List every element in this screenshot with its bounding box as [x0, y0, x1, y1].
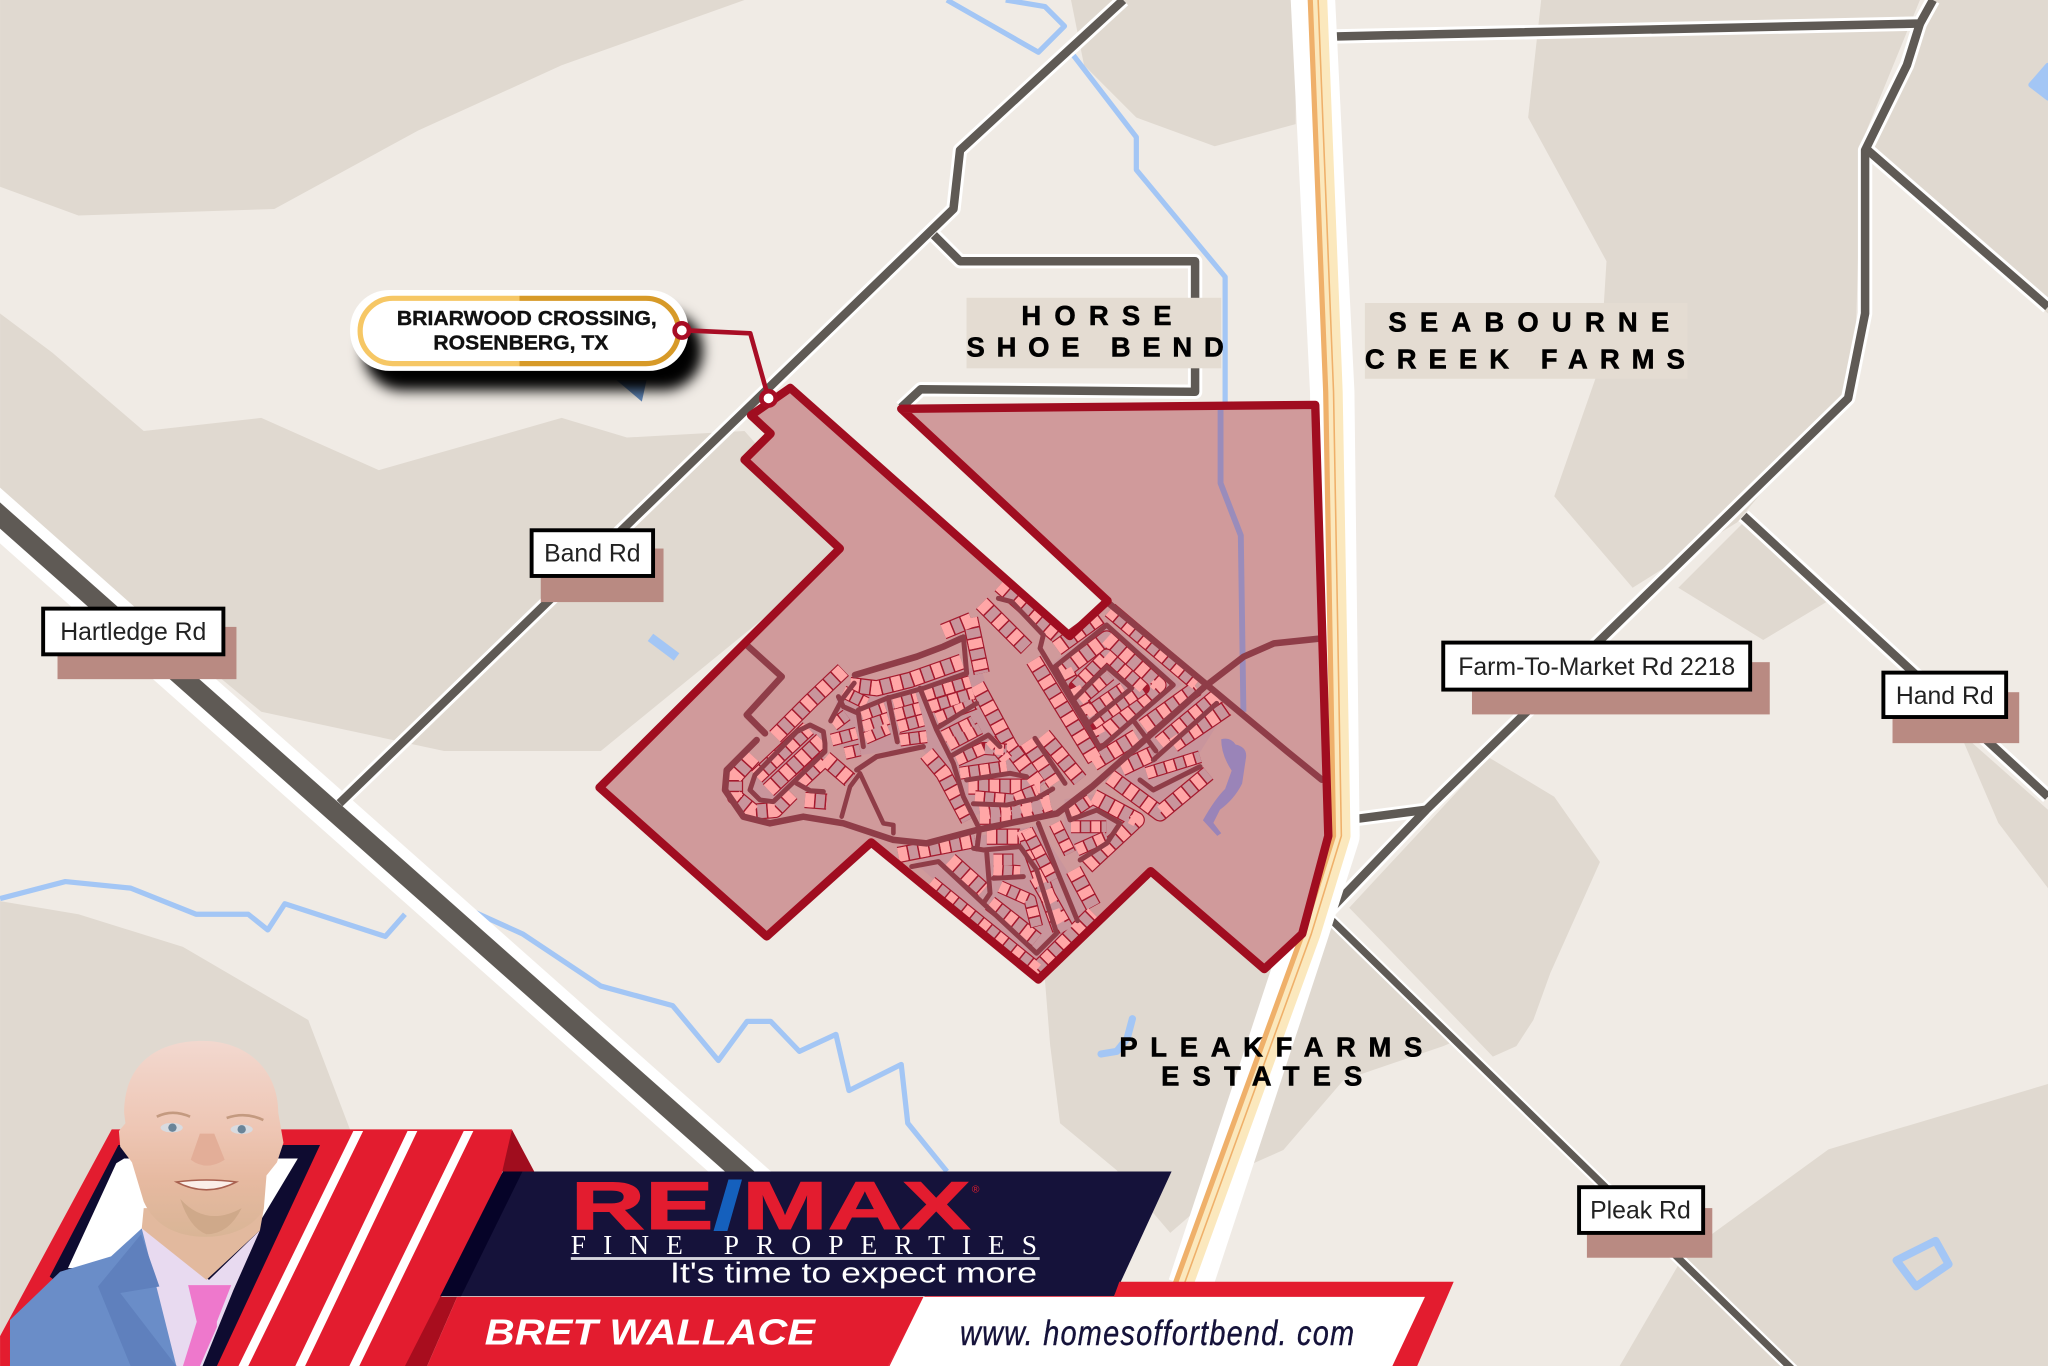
label: Pleakfarms Estates: PLEAKFARMS [1119, 1032, 1422, 1063]
creek through development [1221, 405, 1243, 712]
label: Seabourne Creek Farms [1365, 307, 1685, 374]
road label: Farm-To-Market Rd 2218: Farm-To-Market Rd 2218 [1458, 654, 1735, 681]
website banner: www. homesoffortbend. com [960, 1314, 1354, 1353]
internal collector roads [725, 603, 1322, 843]
callout: Briarwood Crossing: ROSENBERG, TX [433, 332, 609, 354]
road label: Hartledge Rd [43, 609, 236, 679]
residential lots [735, 585, 1227, 970]
branding panel: red striped backing [0, 1129, 534, 1366]
lot block backing [750, 622, 1228, 973]
highway: Farm-To-Market Rd [1174, 0, 1341, 1286]
Fine Properties wordmark: FINE PROPERTIES [571, 1230, 1037, 1260]
tagline: It's time to expect more [670, 1258, 1037, 1290]
label: Horse Shoe Bend: HORSE [1021, 300, 1172, 331]
road label: Hand Rd [1883, 673, 2019, 743]
website banner [888, 1282, 1454, 1366]
road label: Band Rd: Band Rd [544, 541, 641, 568]
callout: Briarwood Crossing: BRIARWOOD CROSSING, [397, 308, 657, 330]
RE/MAX logo: RE /MAX [571, 1169, 970, 1244]
development boundary [600, 388, 1328, 980]
name banner [405, 1297, 925, 1366]
label: Horse Shoe Bend [967, 300, 1224, 363]
branding panel: navy logo block [440, 1172, 1172, 1296]
development outline [600, 388, 1328, 980]
road label: Band Rd [532, 530, 664, 602]
agent portrait [10, 1041, 283, 1366]
RE/MAX logo: ® [972, 1184, 980, 1195]
label: Pleakfarms Estates: ESTATES [1161, 1060, 1362, 1091]
road label: Farm-To-Market Rd 2218 [1443, 643, 1770, 714]
callout: Briarwood Crossing [350, 290, 776, 406]
label: Horse Shoe Bend: SHOE BEND [967, 332, 1224, 363]
label: Seabourne Creek Farms: SEABOURNE [1388, 307, 1669, 338]
pond [1203, 739, 1246, 836]
name banner: BRET WALLACE [485, 1311, 817, 1352]
road label: Hand Rd: Hand Rd [1896, 683, 1994, 710]
road label: Pleak Rd: Pleak Rd [1590, 1198, 1691, 1225]
neighbourhood label backdrops [967, 298, 1687, 379]
residential streets [750, 598, 1217, 953]
road label: Pleak Rd [1579, 1187, 1712, 1258]
label: Pleakfarms Estates [1119, 1032, 1422, 1091]
label: Seabourne Creek Farms: CREEK FARMS [1365, 343, 1685, 374]
road label: Hartledge Rd: Hartledge Rd [60, 619, 206, 646]
